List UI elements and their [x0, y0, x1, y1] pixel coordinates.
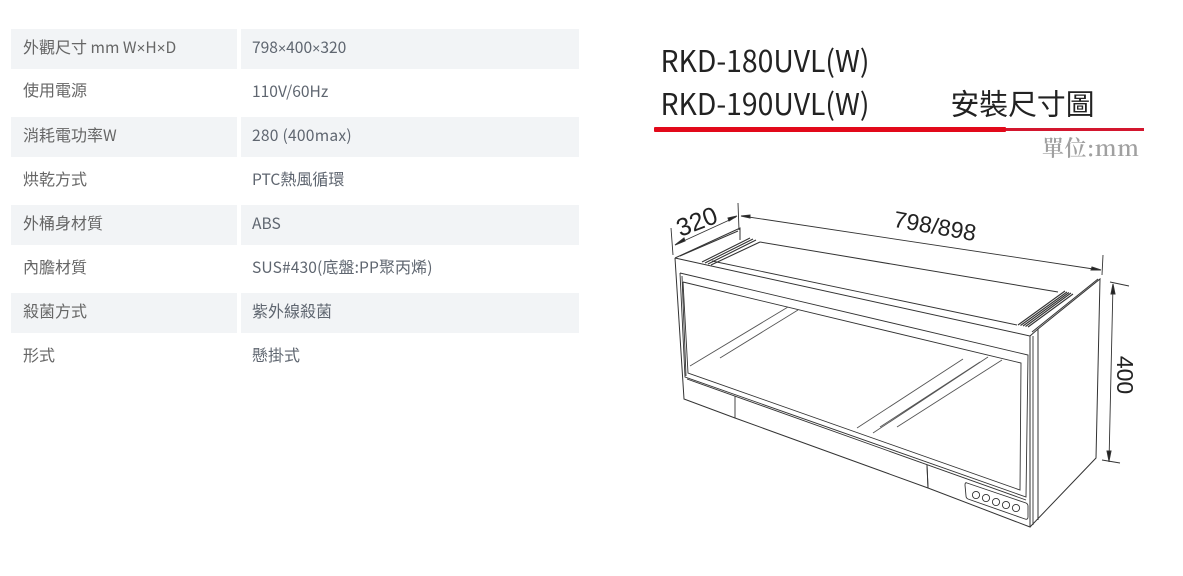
dimension diagram	[671, 201, 1138, 527]
red underline	[654, 127, 1144, 132]
dimension: width 798/898: 798/898	[892, 206, 978, 246]
text: 280 (400max)	[252, 124, 352, 146]
title: 安裝尺寸圖	[950, 82, 1094, 124]
dimension: height 400: 400	[1112, 356, 1138, 394]
text: 使用電源	[23, 77, 87, 101]
text: 外觀尺寸 mm W×H×D	[23, 34, 176, 58]
row: inner material	[23, 254, 433, 278]
text: 形式	[23, 342, 55, 366]
row: outer material	[11, 205, 579, 245]
row: sterilization method	[11, 293, 579, 333]
control panel	[965, 483, 1028, 519]
front frame	[680, 273, 1033, 525]
text: 殺菌方式	[23, 298, 87, 322]
model name 180: RKD-180UVL(W)	[660, 37, 870, 81]
row: power supply	[23, 77, 328, 102]
text: 紫外線殺菌	[252, 298, 332, 322]
text: PTC熱風循環	[252, 166, 344, 190]
dimension: height 400	[1102, 282, 1138, 463]
text: 外桶身材質	[23, 210, 103, 234]
spec table	[11, 29, 579, 366]
text: 內膽材質	[23, 254, 87, 278]
text: ABS	[252, 212, 281, 234]
text: 烘乾方式	[23, 166, 87, 190]
heading: model names and title	[660, 37, 1094, 124]
dimension: width 798/898	[741, 206, 1103, 275]
text: 110V/60Hz	[252, 80, 328, 102]
model name 190: RKD-190UVL(W)	[660, 80, 870, 124]
text: 消耗電功率W	[23, 122, 117, 146]
rear rails	[702, 238, 1073, 327]
row: power consumption	[11, 117, 579, 157]
cabinet outline	[675, 228, 1100, 527]
dimension: depth 320: 320	[673, 201, 721, 243]
buttons	[972, 491, 1020, 512]
row: drying method	[23, 166, 344, 190]
unit label: 單位:mm	[1042, 132, 1139, 163]
text: 懸掛式	[252, 342, 300, 366]
dimension: depth 320	[671, 201, 739, 255]
text: 798×400×320	[252, 36, 346, 58]
row: form	[23, 342, 300, 366]
interior shelf lines	[690, 307, 1002, 433]
row: dimensions	[11, 29, 579, 69]
text: SUS#430(底盤:PP聚丙烯)	[252, 254, 433, 278]
